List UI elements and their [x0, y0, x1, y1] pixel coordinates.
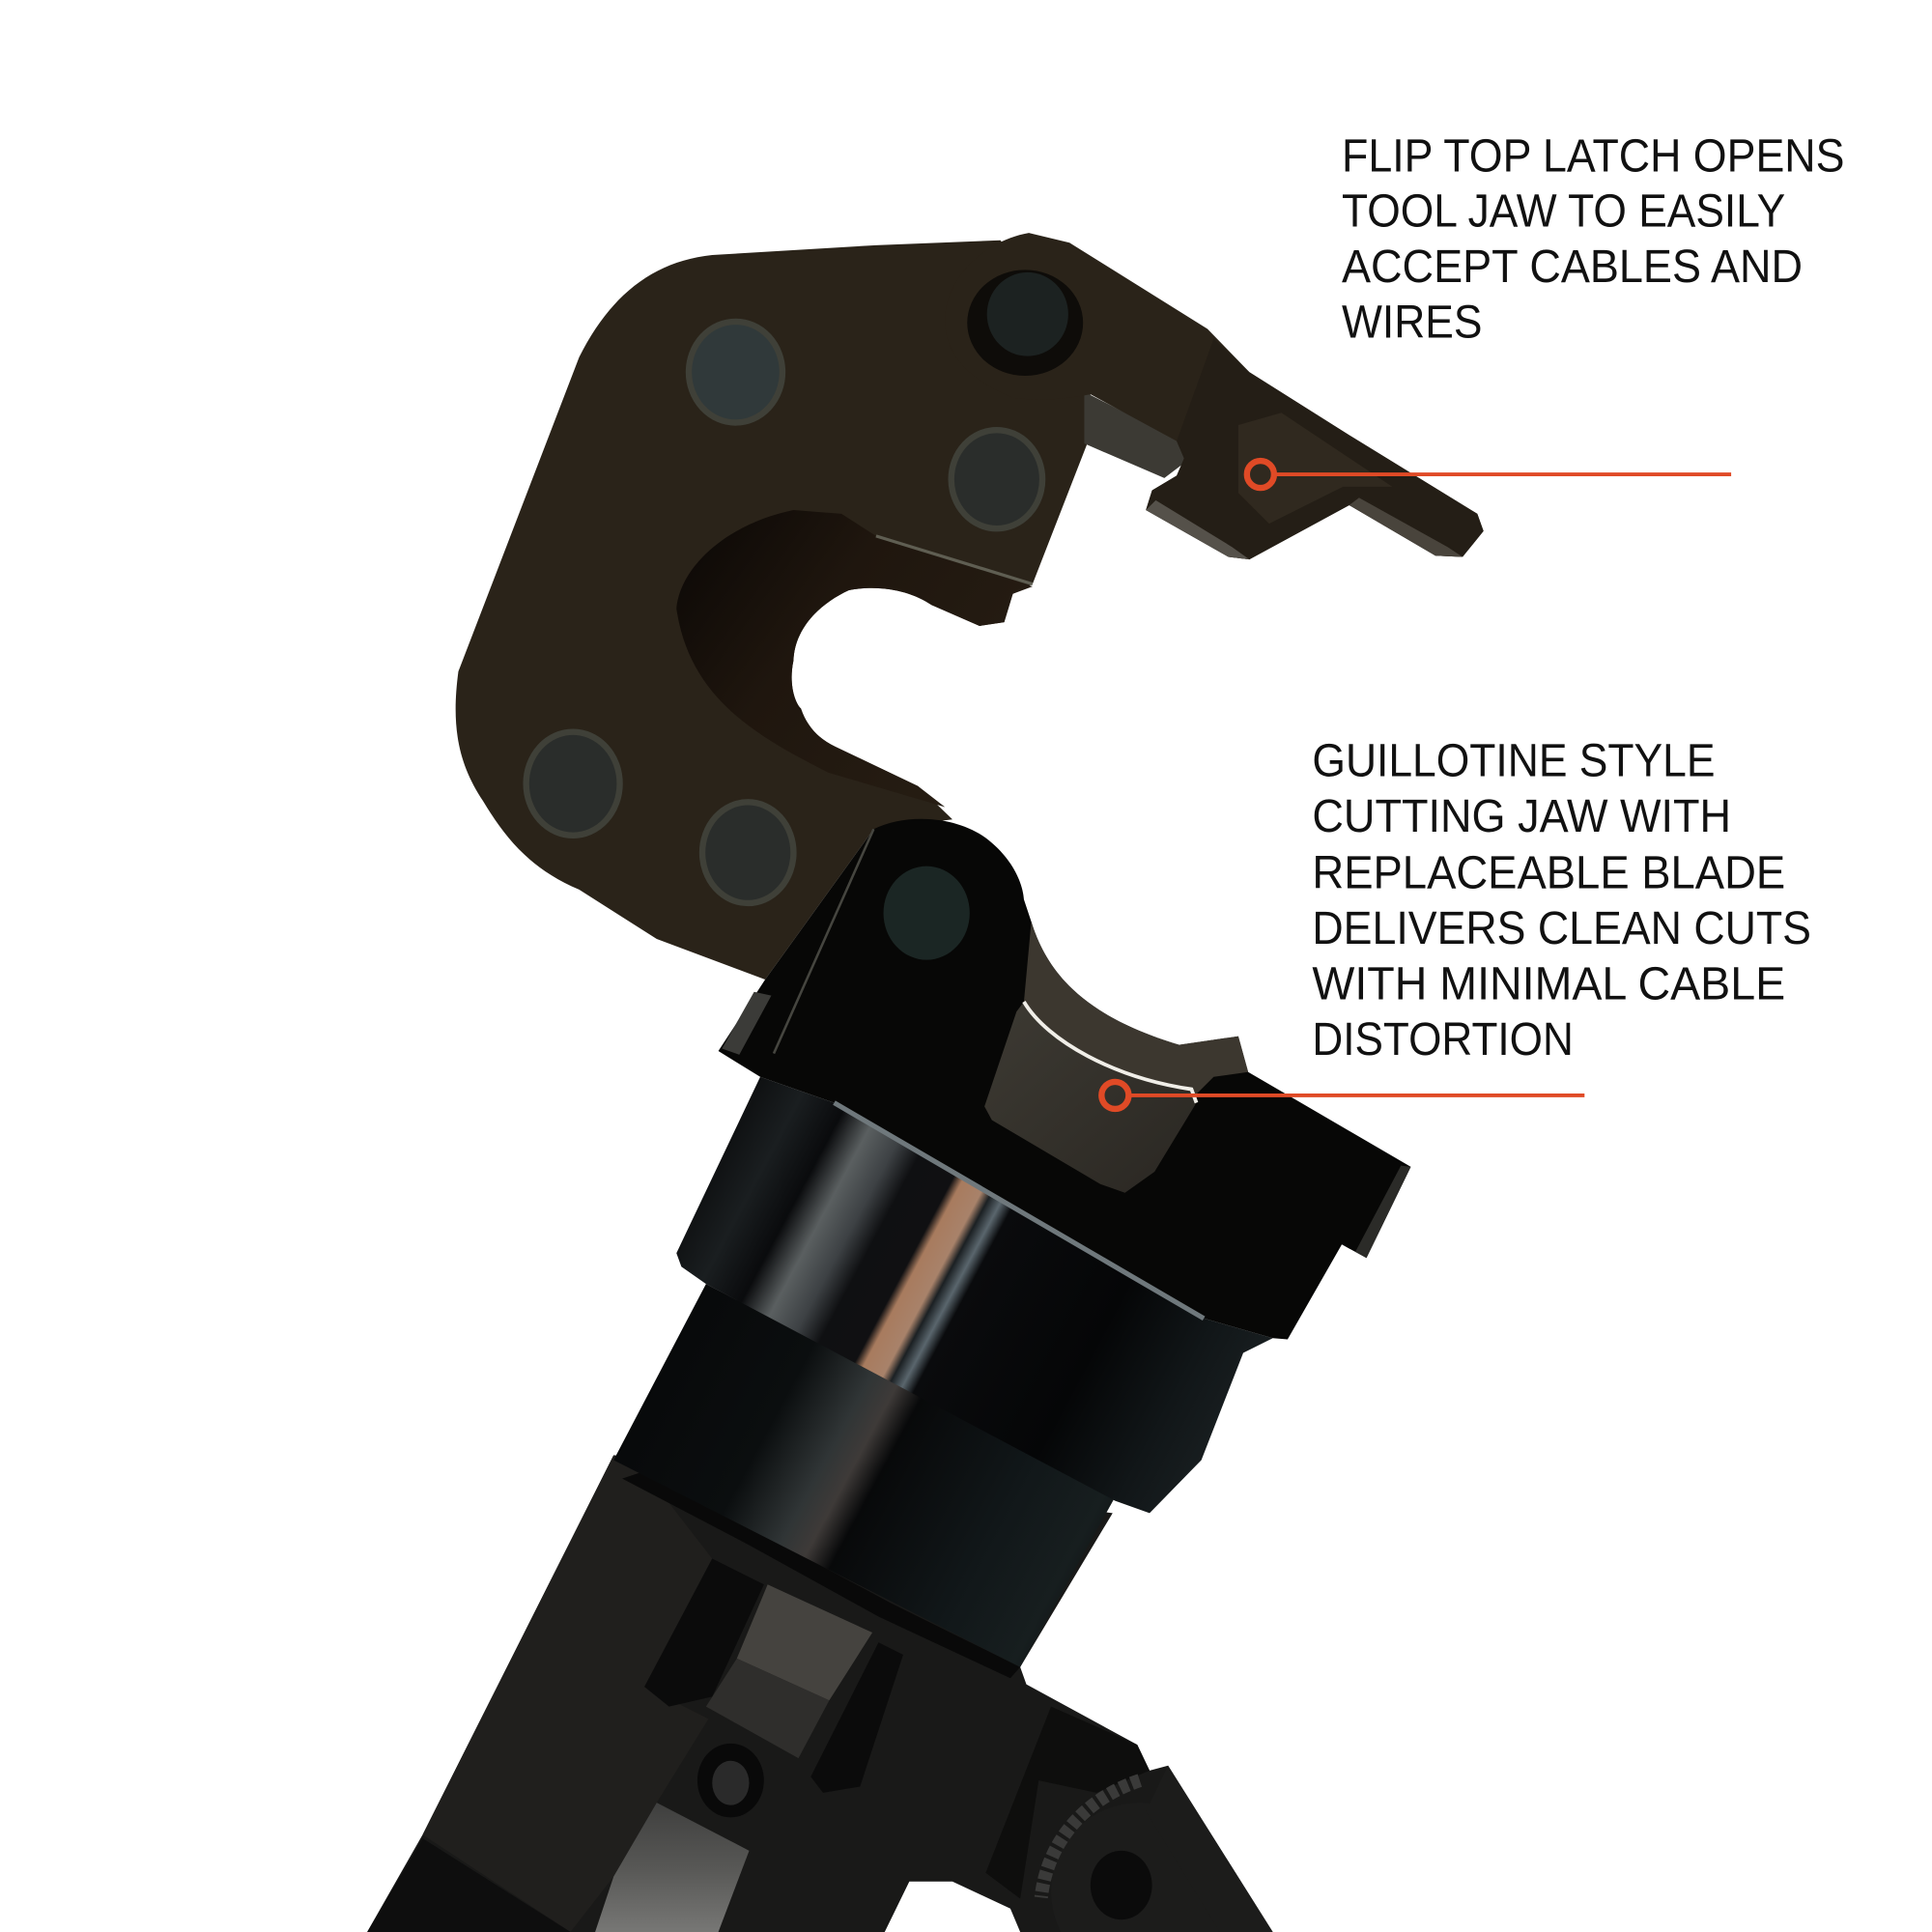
hinge pin	[884, 867, 970, 960]
blade edge highlight	[1024, 1002, 1197, 1103]
callout text: flip top latch: WIRES	[1342, 296, 1482, 348]
callout text: guillotine cutting jaw	[1312, 735, 1811, 1065]
bolts	[526, 322, 1042, 903]
callout text: guillotine cutting jaw: DISTORTION	[1312, 1013, 1574, 1065]
flip top latch	[945, 233, 1484, 559]
callout text: flip top latch: FLIP TOP LATCH OPENS	[1342, 129, 1844, 182]
callout: flip top latch	[1247, 129, 1844, 488]
chrome edge	[835, 1103, 1204, 1319]
lower tool body	[367, 1455, 1273, 1932]
replaceable blade	[984, 1002, 1197, 1193]
lower jaw and block	[719, 819, 1410, 1339]
latch pin	[967, 270, 1083, 376]
callout text: flip top latch: TOOL JAW TO EASILY	[1342, 185, 1785, 238]
tool illustration	[367, 233, 1484, 1932]
callout text: guillotine cutting jaw: GUILLOTINE STYLE	[1312, 735, 1716, 787]
callout: guillotine cutting jaw	[1101, 735, 1811, 1109]
callout text: flip top latch	[1342, 129, 1844, 348]
callout text: guillotine cutting jaw: REPLACEABLE BLADE	[1312, 847, 1785, 899]
callout text: guillotine cutting jaw: DELIVERS CLEAN CUTS	[1312, 902, 1811, 954]
leader line: flip top latch	[1247, 461, 1731, 488]
leader line: guillotine cutting jaw	[1101, 1082, 1584, 1109]
callout text: guillotine cutting jaw: CUTTING JAW WITH	[1312, 790, 1731, 842]
cutting edge plate	[1024, 922, 1248, 1094]
collar ring	[676, 1077, 1273, 1513]
C-shaped recess	[676, 510, 1033, 807]
guide under latch	[1084, 392, 1185, 478]
hydraulic cylinder	[613, 1284, 1115, 1667]
jaw plate	[456, 241, 1091, 980]
side sliver highlight	[722, 992, 771, 1055]
block end facet	[1355, 1166, 1410, 1258]
callout text: guillotine cutting jaw: WITH MINIMAL CABLE	[1312, 957, 1785, 1009]
callout text: flip top latch: ACCEPT CABLES AND	[1342, 241, 1803, 293]
